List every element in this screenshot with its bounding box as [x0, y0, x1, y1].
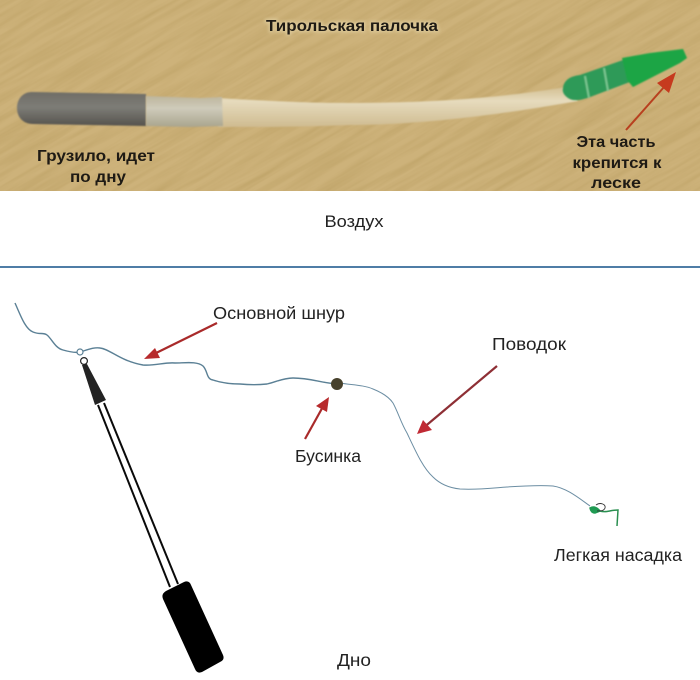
stick tube lines — [98, 403, 178, 587]
leader line — [340, 383, 590, 506]
title: Тирольская палочка — [266, 18, 438, 35]
label: main line: Основной шнур — [213, 303, 345, 323]
label: light bait: Легкая насадка — [554, 545, 682, 565]
black sinker — [162, 581, 224, 673]
tyrolean stick diagram — [77, 349, 224, 673]
photo: green connector — [563, 49, 687, 100]
bead — [331, 378, 343, 390]
panel: photo of the tyrolean stick — [0, 0, 700, 191]
label: line attachment — [572, 134, 662, 192]
main line — [15, 303, 337, 385]
photo: aluminium sleeve — [146, 96, 223, 127]
water surface line — [0, 266, 700, 268]
photo: transparent tube — [218, 87, 578, 127]
label: air: Воздух — [324, 212, 384, 231]
arrow: to green tip — [626, 72, 676, 130]
wood table background — [0, 0, 700, 191]
black cone — [82, 364, 106, 405]
white bead — [81, 358, 87, 364]
label: sinker: Грузило, идет — [37, 148, 155, 165]
label: leader: Поводок — [492, 334, 566, 354]
label: line attachment: Эта часть — [576, 134, 656, 151]
label: line attachment: крепится к — [572, 155, 662, 172]
label: bead: Бусинка — [295, 446, 361, 466]
hook with light bait — [590, 504, 618, 526]
arrow: leader — [417, 366, 497, 434]
label: line attachment: леске — [591, 175, 641, 192]
label: sinker — [37, 148, 155, 186]
arrow: main line — [144, 323, 217, 359]
swivel ring — [77, 349, 83, 355]
label: sinker: по дну — [70, 169, 126, 186]
photo: lead sinker — [17, 92, 146, 126]
title: Тирольская палочка — [266, 18, 438, 35]
arrow: bead — [305, 397, 329, 439]
label: bottom: Дно — [337, 650, 371, 670]
